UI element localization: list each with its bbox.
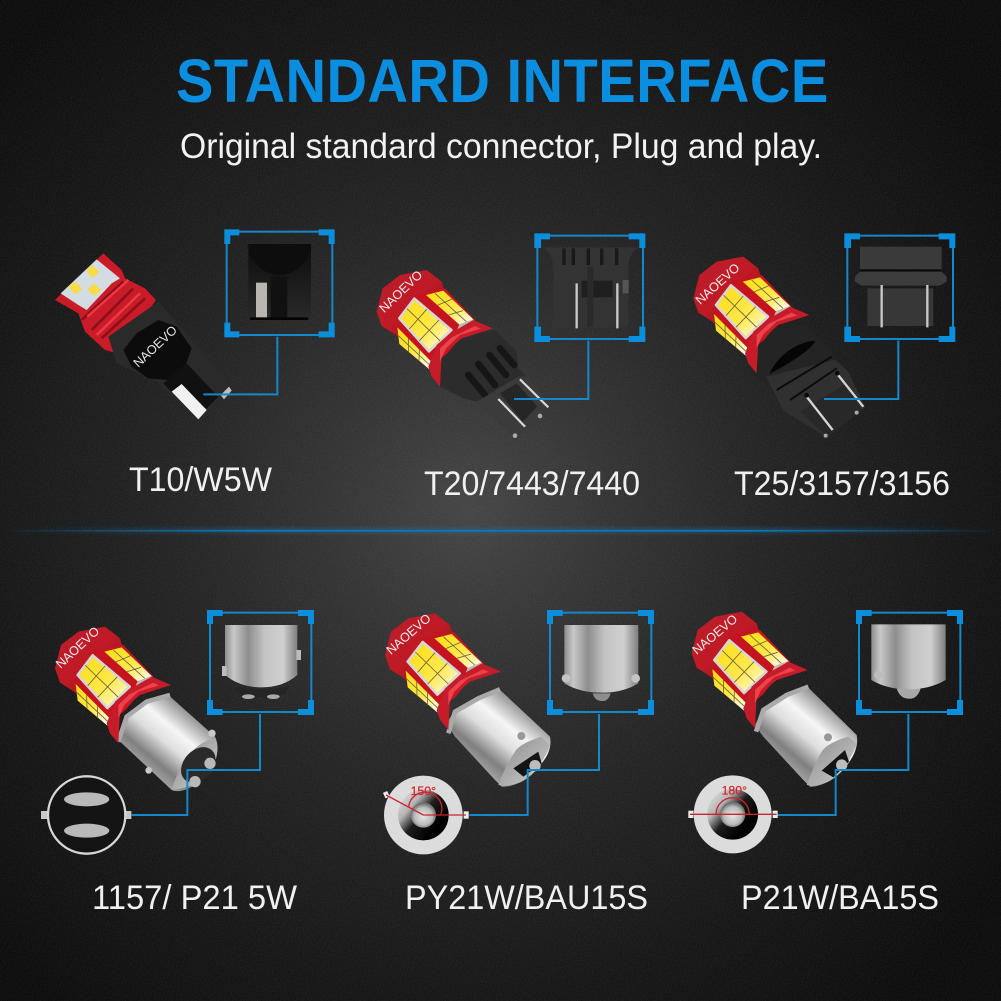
T20 connector callout box (534, 233, 645, 342)
subtitle: Original standard connector, Plug and play. (180, 127, 822, 166)
title: STANDARD INTERFACE (176, 48, 828, 116)
product: PY21W/BAU15S bulb (383, 610, 654, 854)
T10 connector callout box (224, 229, 335, 337)
1157 socket end view (41, 776, 131, 854)
T10 red LED head (55, 253, 156, 353)
T20 red LED head (377, 270, 493, 387)
T20 brand text: NAOEVO (377, 268, 425, 316)
PY21W silver base (447, 688, 551, 787)
PY21W socket end view with 150 degree angle: 150° (411, 784, 436, 798)
P21W connector callout box (856, 610, 963, 715)
PY21W connector line (469, 714, 599, 815)
product: 1157/P21 5W bulb (41, 610, 314, 854)
T25 connector callout box (844, 233, 955, 342)
product: P21W/BA15S bulb (688, 610, 963, 853)
label: T25/3157/3156: T25/3157/3156 (734, 465, 950, 503)
P21W red LED head (692, 612, 808, 728)
P21W socket end view with 180 degree angle (688, 775, 778, 853)
PY21W connector callout box (547, 610, 654, 715)
T10 black base (108, 302, 232, 422)
product: T10/W5W bulb (55, 229, 335, 422)
1157 connector callout box (207, 610, 314, 715)
product: T20/7443/7440 bulb (377, 233, 645, 439)
P21W connector line (777, 714, 908, 815)
1157 brand text: NAOEVO (53, 624, 102, 671)
T25 red LED head (693, 257, 809, 373)
PY21W red LED head (385, 613, 501, 730)
label: PY21W/BAU15S: PY21W/BAU15S (405, 879, 648, 917)
T20 connector line (514, 341, 588, 399)
divider (0, 528, 1001, 533)
T10 connector line (203, 337, 277, 394)
T25 brand text: NAOEVO (693, 261, 743, 307)
product: T25/3157/3156 bulb (693, 233, 955, 438)
1157 silver base (118, 695, 223, 791)
1157 connector line (132, 714, 260, 815)
PY21W brand text: NAOEVO (384, 611, 434, 657)
1157 red LED head (55, 627, 171, 743)
label: T20/7443/7440: T20/7443/7440 (424, 465, 640, 503)
T25 black base (755, 327, 865, 438)
T20 black base (440, 330, 551, 439)
P21W brand text: NAOEVO (690, 612, 740, 657)
P21W socket end view with 180 degree angle: 180° (722, 784, 747, 798)
PY21W socket end view with 150 degree angle (383, 776, 469, 854)
label: 1157/ P21 5W: 1157/ P21 5W (92, 879, 297, 917)
label: P21W/BA15S: P21W/BA15S (741, 879, 939, 917)
T25 connector line (824, 341, 898, 399)
P21W silver base (755, 686, 857, 787)
T10 black base: NAOEVO (131, 323, 180, 370)
label: T10/W5W: T10/W5W (129, 461, 272, 499)
